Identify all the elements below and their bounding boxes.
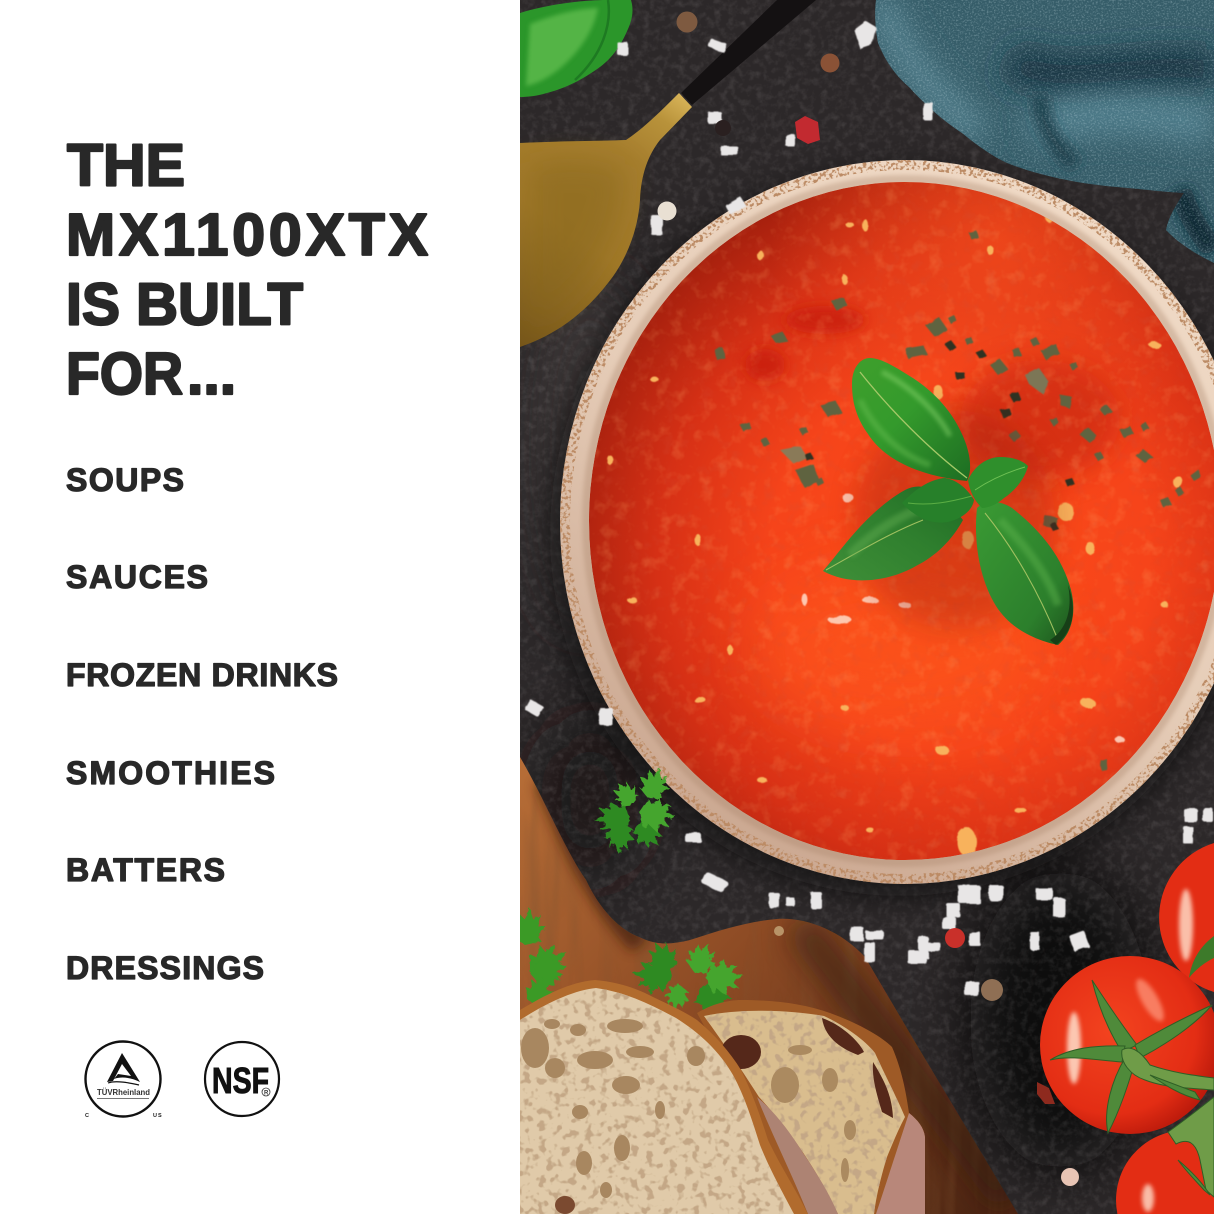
list of uses: SAUCES bbox=[66, 559, 208, 595]
parsley bbox=[520, 768, 744, 1010]
icon: TUV Rheinland certification mark bbox=[85, 1042, 163, 1119]
tomato: center bbox=[1040, 956, 1214, 1134]
leaf: lower right bbox=[976, 502, 1073, 645]
icon: NSF certification mark: NSF bbox=[212, 1060, 269, 1101]
list of uses: SMOOTHIES bbox=[66, 755, 275, 791]
panel: white text column bbox=[0, 0, 520, 1214]
front slice bbox=[520, 980, 808, 1214]
heading: MX1100XTX bbox=[66, 202, 428, 268]
heading: BUILT bbox=[136, 272, 303, 338]
heading: FOR bbox=[66, 341, 183, 407]
heading: THE bbox=[67, 132, 185, 198]
back slice bbox=[697, 1000, 925, 1214]
peppercorns bbox=[658, 12, 1079, 1186]
soup bbox=[580, 170, 1214, 870]
list of uses bbox=[66, 462, 338, 986]
bread slices bbox=[520, 980, 925, 1214]
wooden cutting board bbox=[520, 750, 1030, 1214]
leaf: small right bbox=[968, 457, 1028, 508]
icon: NSF certification mark bbox=[205, 1042, 279, 1116]
photo: tomato soup flat lay bbox=[508, 0, 1214, 1214]
heading bbox=[66, 132, 428, 407]
bowl bbox=[550, 160, 1214, 896]
leaf: upper bbox=[852, 358, 970, 481]
tomato vine and calyx bbox=[1050, 980, 1214, 1197]
leaf: left bbox=[823, 487, 963, 580]
tomato: upper right bbox=[1159, 843, 1214, 992]
pepper and tomato seeds bbox=[607, 207, 1202, 856]
dark stone surface bbox=[520, 0, 1214, 1214]
icon: TUV Rheinland certification mark: TÜVRheinland bbox=[97, 1088, 150, 1097]
leaf: small center bbox=[902, 478, 974, 523]
list of uses: DRESSINGS bbox=[66, 950, 264, 986]
spoon bbox=[520, 0, 816, 347]
tomato: bottom bbox=[1116, 1130, 1214, 1214]
dried herb flecks bbox=[715, 230, 1201, 771]
heading: IS bbox=[66, 272, 120, 338]
basil sprig on soup bbox=[823, 358, 1073, 645]
heading: ... bbox=[187, 341, 236, 407]
blue linen cloth bbox=[870, 0, 1214, 270]
icon: NSF certification mark: R bbox=[264, 1090, 269, 1096]
sea salt crystals bbox=[524, 21, 1213, 996]
icon: TUV Rheinland certification mark: US bbox=[153, 1113, 163, 1119]
list of uses: BATTERS bbox=[66, 852, 225, 888]
list of uses: FROZEN DRINKS bbox=[66, 657, 338, 693]
basil leaf, top left bbox=[520, 0, 633, 97]
vine tomatoes bbox=[1040, 843, 1214, 1214]
list of uses: SOUPS bbox=[66, 462, 184, 498]
icon: TUV Rheinland certification mark: C bbox=[85, 1113, 89, 1119]
